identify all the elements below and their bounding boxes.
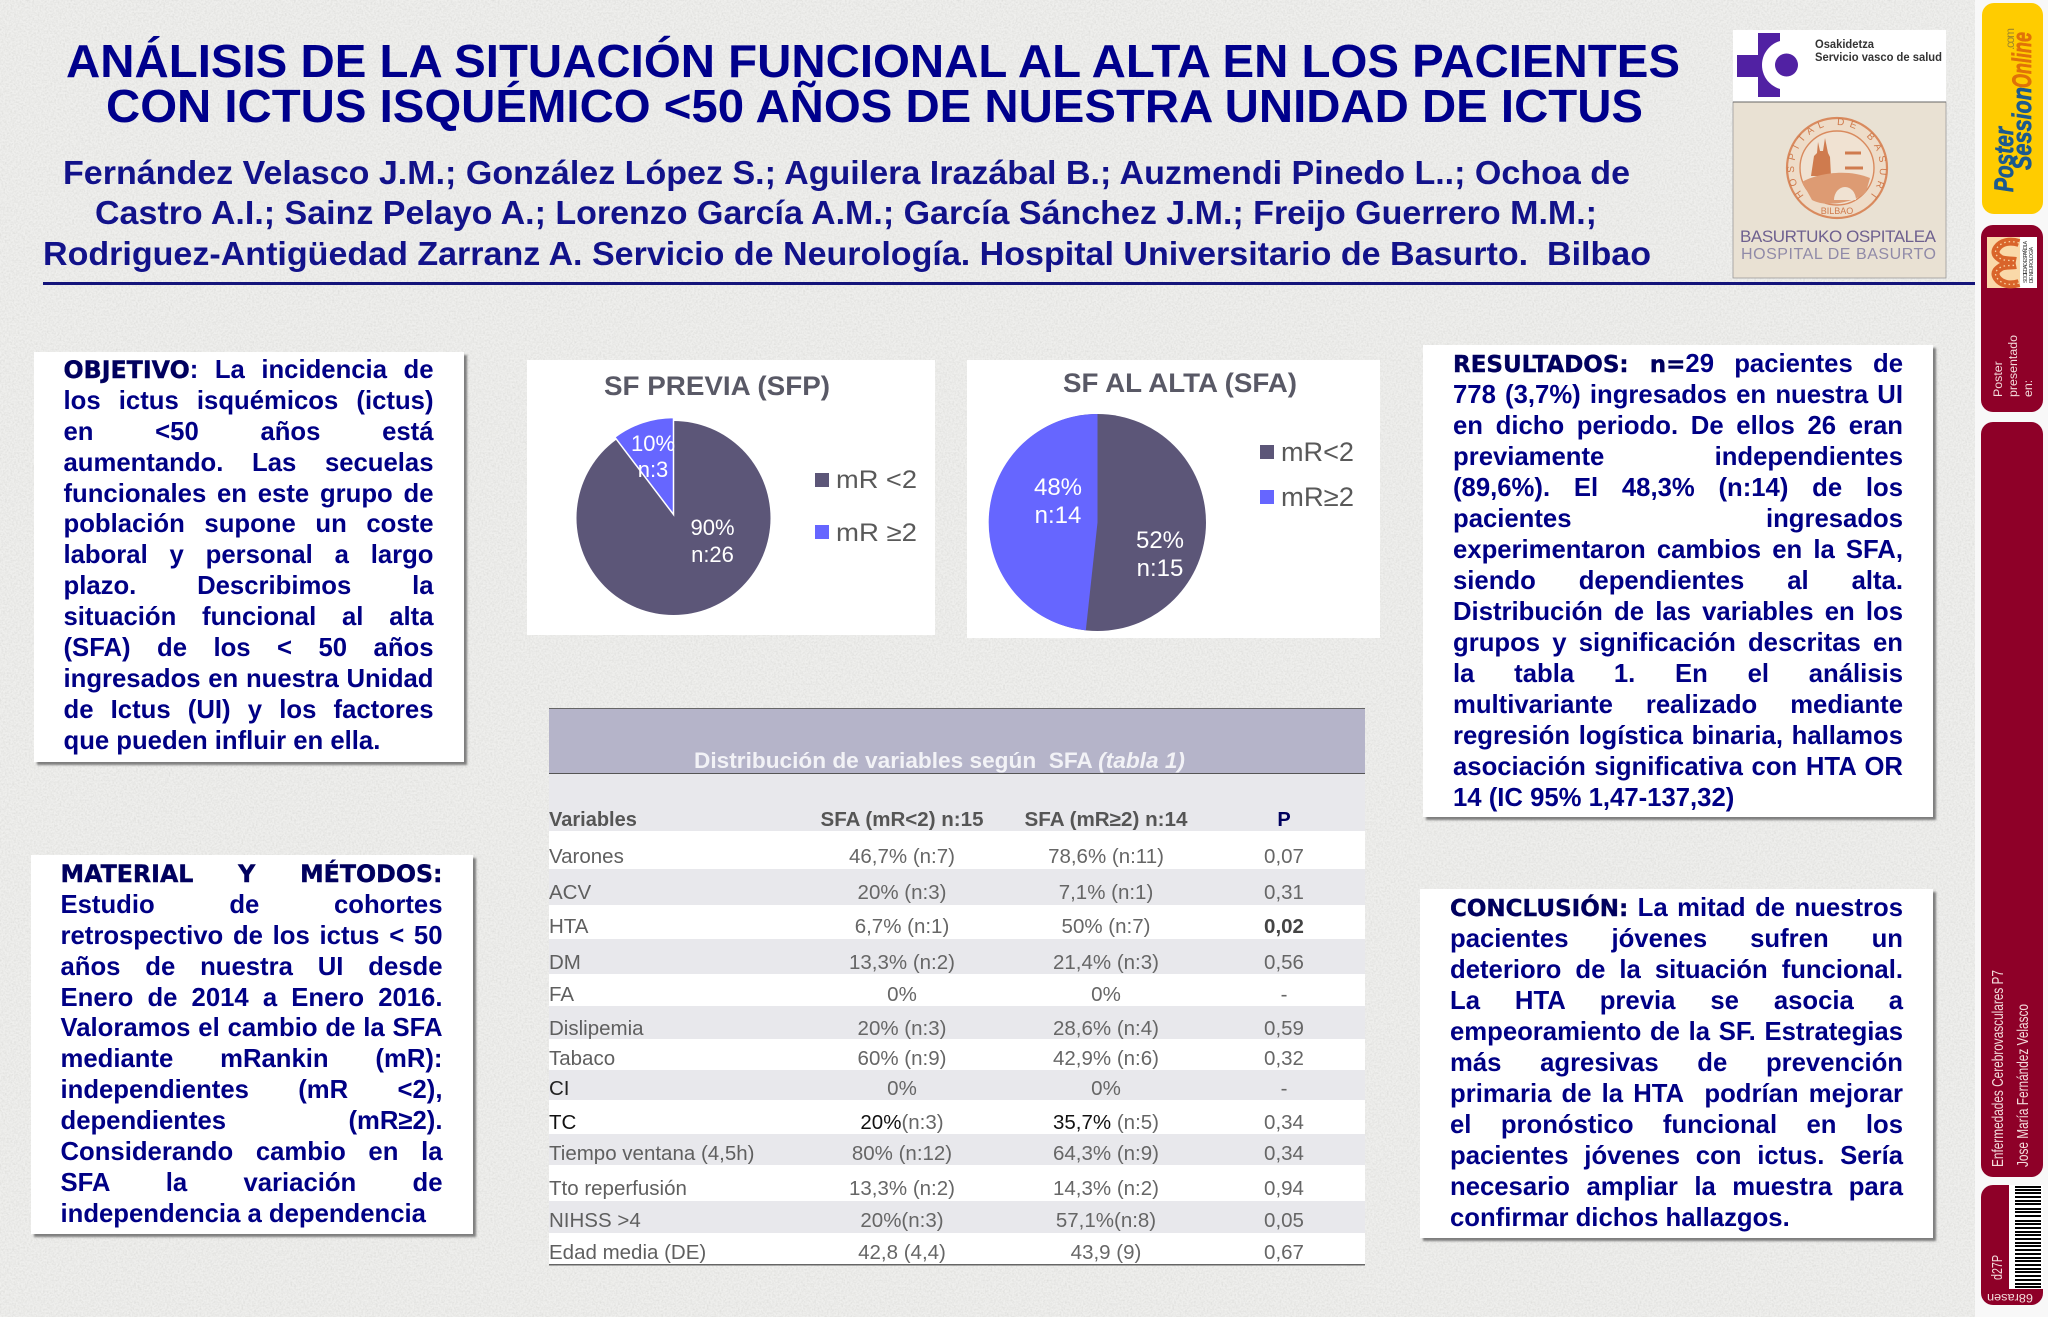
resultados text: grupos y significación descritas en (1453, 629, 1903, 657)
material y métodos text: Enero de 2014 a Enero 2016. (60, 984, 442, 1012)
panel: conclusión (1420, 889, 1933, 1238)
table rows: 20% (n:3) (858, 881, 946, 904)
icon: neurology society logo: DE NEUROLOGÍA (2028, 246, 2035, 283)
resultados text: siendo dependientes al alta. (1453, 567, 1903, 595)
material y métodos text: MATERIAL Y MÉTODOS: (60, 860, 442, 888)
barcode (2015, 1187, 2041, 1287)
conclusión text: el pronóstico funcional en los (1450, 1111, 1903, 1139)
conclusión text: empeoramiento de la SF. Estrategias (1450, 1018, 1903, 1046)
table rows: 13,3% (n:2) (849, 1177, 955, 1200)
legend (1260, 437, 1354, 512)
authors: Castro A.I.; Sainz Pelayo A.; Lorenzo García A.M.; García Sánchez J.M.; Freijo Guerrero M.M.; (95, 194, 1597, 231)
table header row: SFA (mR≥2) n:14 (1024, 809, 1188, 831)
pie chart: 52% (1136, 527, 1184, 554)
logos: Osakidetza and Hospital de Basurto (1732, 30, 1946, 278)
chart title: SF PREVIA (SFP) (604, 371, 830, 401)
table rows: 0,67 (1264, 1241, 1304, 1264)
table rows: 0,34 (1264, 1142, 1304, 1165)
table rows: 0,32 (1264, 1047, 1304, 1070)
table rows: 14,3% (n:2) (1053, 1177, 1159, 1200)
table rows: 64,3% (n:9) (1053, 1142, 1159, 1165)
sidebar: PosterSessionOnline badge: Session (2007, 87, 2037, 170)
authors (43, 154, 1651, 272)
Osakidetza name: Servicio vasco de salud (1815, 52, 1942, 64)
table rows: 20%(n:3) (860, 1209, 944, 1232)
panel: material y métodos (31, 855, 473, 1234)
material y métodos text: dependientes (mR≥2). (60, 1107, 442, 1135)
conclusión text: más agresivas de prevención (1450, 1049, 1903, 1077)
presented-at label: presentado (2006, 335, 2020, 397)
table rows: HTA (549, 915, 589, 938)
conclusión text: confirmar dichos hallazgos. (1450, 1204, 1790, 1232)
resultados text: previamente independientes (1453, 443, 1903, 471)
table rows: - (1281, 1077, 1287, 1100)
sidebar: poster code and barcode (1981, 1185, 2043, 1305)
table rows: 6,7% (n:1) (855, 915, 949, 938)
table rows: 0,59 (1264, 1017, 1304, 1040)
panel: SF al alta pie chart (967, 360, 1380, 638)
objetivo text: población supone un coste (64, 510, 434, 538)
objetivo text: de Ictus (UI) y los factores (64, 696, 434, 724)
authors: Rodriguez-Antigüedad Zarranz A. Servicio de Neurología. Hospital Universitario de Basurto. Bilbao (43, 235, 1651, 272)
objetivo text: funcionales en este grupo de (64, 480, 434, 508)
table header row: SFA (mR<2) n:15 (820, 809, 984, 831)
table rows: FA (549, 983, 574, 1006)
resultados text: en dicho periodo. De ellos 26 eran (1453, 412, 1903, 440)
table rows: ACV (549, 881, 591, 904)
table rows: 7,1% (n:1) (1059, 881, 1153, 904)
resultados text: multivariante realizado mediante (1453, 691, 1903, 719)
pie chart: n:14 (1035, 502, 1081, 529)
resultados text: 14 (IC 95% 1,47-137,32) (1453, 784, 1734, 812)
authors: Fernández Velasco J.M.; González López S.; Aguilera Irazábal B.; Auzmendi Pinedo L..; Ochoa de (63, 154, 1630, 191)
conclusión text: pacientes jóvenes sufren un (1450, 925, 1903, 953)
icon: Osakidetza cross (1737, 33, 1812, 97)
table rows: 0,34 (1264, 1111, 1304, 1134)
resultados text: (89,6%). El 48,3% (n:14) de los (1453, 474, 1903, 502)
legend (815, 466, 917, 547)
panel: resultados (1423, 345, 1933, 817)
objetivo text: OBJETIVO: La incidencia de (64, 356, 434, 384)
resultados text: asociación significativa con HTA OR (1453, 753, 1903, 781)
table rows: Tiempo ventana (4,5h) (549, 1142, 754, 1165)
legend: mR≥2 (1281, 482, 1354, 512)
table rows: 21,4% (n:3) (1053, 951, 1159, 974)
conclusión text (1450, 894, 1904, 1232)
material y métodos text (60, 860, 443, 1228)
hospital name: HOSPITAL DE BASURTO (1741, 246, 1936, 263)
pie chart (989, 414, 1206, 631)
table rows: 60% (n:9) (858, 1047, 946, 1070)
icon: neurology society logo: SOCIEDAD ESPAÑOLA (2022, 240, 2029, 283)
presented-at label (1991, 335, 2035, 397)
table rows (549, 831, 1365, 1266)
publisher mark: 68rasen (1987, 1291, 2033, 1305)
table rows: 0,07 (1264, 845, 1304, 868)
table title band (549, 708, 1365, 774)
resultados text: regresión logística binaria, hallamos (1453, 722, 1903, 750)
table header row (549, 774, 1365, 831)
resultados text: Distribución de las variables en los (1453, 598, 1903, 626)
table rows: Edad media (DE) (549, 1241, 706, 1264)
table rows: TC (549, 1111, 577, 1134)
pie chart: n:3 (638, 457, 668, 482)
objetivo text: los ictus isquémicos (ictus) (64, 387, 434, 415)
legend: mR <2 (836, 466, 917, 494)
panel: SF previa pie chart (527, 360, 935, 635)
objetivo text: laboral y personal a largo (64, 541, 434, 569)
presented-at label: en: (2021, 380, 2035, 397)
table rows: 0,31 (1264, 881, 1304, 904)
sidebar: PosterSessionOnline badge: Poster (1989, 126, 2019, 192)
poster code: d27P (1989, 1255, 2006, 1280)
table rows: 0,02 (1264, 915, 1304, 938)
icon: hospital seal (1786, 116, 1888, 220)
table: distribution of variables (549, 708, 1365, 1266)
table rows: 28,6% (n:4) (1053, 1017, 1159, 1040)
table rows: Dislipemia (549, 1017, 644, 1040)
objetivo text: que pueden influir en ella. (64, 727, 380, 755)
title: ANÁLISIS DE LA SITUACIÓN FUNCIONAL AL ALTA EN LOS PACIENTES (66, 35, 1680, 87)
material y métodos text: años de nuestra UI desde (60, 953, 442, 981)
material y métodos text: mediante mRankin (mR): (60, 1045, 442, 1073)
table rows: Varones (549, 845, 624, 868)
title (66, 35, 1680, 132)
objetivo text: en <50 años está (64, 418, 434, 446)
objetivo text: ingresados en nuestra Unidad (64, 665, 434, 693)
pie chart: 48% (1034, 474, 1082, 501)
table header row: P (1277, 809, 1291, 831)
table rows: 43,9 (9) (1071, 1241, 1141, 1264)
table rows: 42,8 (4,4) (858, 1241, 946, 1264)
material y métodos text: independencia a dependencia (60, 1200, 426, 1228)
table rows: 0% (1091, 1077, 1121, 1100)
sidebar: category and author (1981, 422, 2043, 1177)
conclusión text: necesario ampliar la muestra para (1450, 1173, 1903, 1201)
material y métodos text: independientes (mR <2), (60, 1076, 442, 1104)
table rows: Tabaco (549, 1047, 615, 1070)
table rows: 0,05 (1264, 1209, 1304, 1232)
sidebar: PosterSessionOnline badge: Online (2007, 32, 2037, 88)
conclusión text: pacientes jóvenes con ictus. Sería (1450, 1142, 1903, 1170)
table rows: 0% (887, 1077, 917, 1100)
hospital name: BASURTUKO OSPITALEA (1740, 227, 1937, 246)
pie chart: 10% (631, 431, 675, 456)
material y métodos text: Estudio de cohortes (60, 891, 442, 919)
title: CON ICTUS ISQUÉMICO <50 AÑOS DE NUESTRA UNIDAD DE ICTUS (106, 80, 1643, 132)
table rows: 80% (n:12) (852, 1142, 952, 1165)
conclusión text: deterioro de la situación funcional. (1450, 956, 1903, 984)
resultados text: experimentaron cambios en la SFA, (1453, 536, 1903, 564)
table rows: 46,7% (n:7) (849, 845, 955, 868)
icon: neurology society logo (1987, 237, 2037, 288)
sidebar: PosterSessionOnline badge (1982, 3, 2043, 214)
resultados text: la tabla 1. En el análisis (1453, 660, 1903, 688)
objetivo text: aumentando. Las secuelas (64, 449, 434, 477)
conclusión text: La HTA previa se asocia a (1450, 987, 1903, 1015)
table rows: 13,3% (n:2) (849, 951, 955, 974)
material y métodos text: SFA la variación de (60, 1169, 442, 1197)
table rows: Tto reperfusión (549, 1177, 687, 1200)
table rows: 0% (887, 983, 917, 1006)
pie chart: 90% (690, 515, 735, 540)
table rows: 0,94 (1264, 1177, 1304, 1200)
pie chart: n:26 (691, 542, 734, 567)
table header row: Variables (549, 809, 637, 831)
objetivo text: (SFA) de los < 50 años (64, 634, 434, 662)
Osakidetza name: Osakidetza (1815, 39, 1875, 51)
material y métodos text: Considerando cambio en la (60, 1138, 442, 1166)
pie chart: n:15 (1137, 555, 1183, 582)
table rows: DM (549, 951, 581, 974)
Osakidetza name (1815, 39, 1942, 64)
objetivo text (64, 356, 434, 755)
resultados text: RESULTADOS: n=29 pacientes de (1453, 350, 1903, 378)
objetivo text: plazo. Describimos la (64, 572, 434, 600)
presented-at label: Poster (1991, 361, 2005, 397)
table rows: 0,56 (1264, 951, 1304, 974)
table rows: CI (549, 1077, 570, 1100)
resultados text: pacientes ingresados (1453, 505, 1903, 533)
sidebar: category and author: Jose María Fernández Velasco (2015, 1004, 2032, 1167)
table title band: Distribución de variables según SFA (tabla 1) (694, 748, 1185, 773)
table rows: 42,9% (n:6) (1053, 1047, 1159, 1070)
resultados text: 778 (3,7%) ingresados en nuestra UI (1453, 381, 1903, 409)
table rows: 57,1%(n:8) (1056, 1209, 1156, 1232)
legend: mR ≥2 (836, 519, 917, 547)
resultados text (1453, 350, 1903, 812)
table rows: 20%(n:3) (860, 1111, 944, 1134)
table rows: 0% (1091, 983, 1121, 1006)
table rows: 50% (n:7) (1062, 915, 1150, 938)
sidebar: PosterSessionOnline badge: .com (2003, 28, 2017, 50)
table rows: NIHSS >4 (549, 1209, 641, 1232)
conclusión text: CONCLUSIÓN: La mitad de nuestros (1450, 894, 1903, 922)
panel: objetivo (34, 352, 464, 762)
legend: mR<2 (1281, 437, 1354, 467)
conclusión text: primaria de la HTA podrían mejorar (1450, 1080, 1903, 1108)
icon: hospital seal: BILBAO (1821, 206, 1853, 216)
sidebar: presented at (1981, 225, 2043, 412)
table rows: 35,7% (n:5) (1053, 1111, 1159, 1134)
table rows: 78,6% (n:11) (1048, 845, 1164, 868)
table rows: - (1281, 983, 1287, 1006)
pie chart (576, 417, 770, 615)
chart title: SF AL ALTA (SFA) (1063, 368, 1297, 398)
hospital name (1740, 227, 1937, 263)
sidebar: category and author: Enfermedades Cerebrovasculares P7 (1990, 970, 2007, 1167)
objetivo text: situación funcional al alta (64, 603, 434, 631)
table rows: 20% (n:3) (858, 1017, 946, 1040)
material y métodos text: retrospectivo de los ictus < 50 (60, 922, 442, 950)
material y métodos text: Valoramos el cambio de la SFA (60, 1014, 442, 1042)
